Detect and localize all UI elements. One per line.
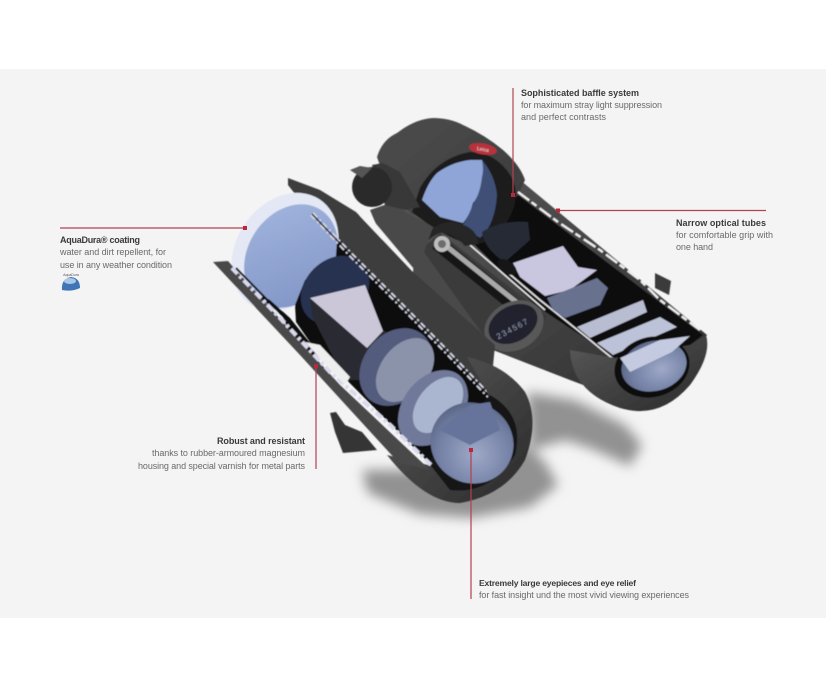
- callout: AquaDura coating: use in any weather condition: [60, 260, 172, 270]
- center hinge block: [372, 163, 420, 210]
- callout: robust and resistant: Robust and resistant: [217, 436, 305, 446]
- near barrel interior: [295, 241, 490, 466]
- far eyepiece rubber: [570, 335, 707, 411]
- objective hood: [377, 118, 525, 240]
- near barrel central wall: [288, 178, 495, 397]
- callout: eyepieces and eye relief: [469, 448, 690, 600]
- tripod bracket: [330, 412, 377, 453]
- near barrel lower wall: [213, 261, 430, 470]
- callout: narrow optical tubes: one hand: [676, 242, 713, 252]
- callout: narrow optical tubes: for comfortable grip with: [676, 230, 773, 240]
- callout: AquaDura coating: water and dirt repellent, for: [59, 247, 166, 257]
- icon: AquaDura water drop: AquaDura: [63, 273, 79, 277]
- central bridge: [350, 163, 490, 352]
- rear ring shadow: [287, 242, 383, 338]
- callout: narrow optical tubes: Narrow optical tubes: [676, 218, 766, 228]
- background panel: [0, 69, 826, 618]
- focus housing: [420, 233, 547, 350]
- near barrel front lens: [225, 186, 357, 326]
- hinge knob: [352, 167, 392, 207]
- diopter ring: 234567: [495, 316, 531, 341]
- objective lens: [422, 160, 483, 223]
- diopter ring: [475, 290, 553, 362]
- lens group 1: [344, 314, 448, 420]
- callout: AquaDura coating: AquaDura® coating: [60, 235, 140, 245]
- top wall detail: [312, 214, 489, 396]
- far barrel body: [390, 180, 707, 410]
- far barrel cutaway interior: [470, 185, 703, 358]
- callout: baffle system: [511, 88, 662, 197]
- callout: robust and resistant: housing and special varnish for metal parts: [138, 461, 306, 471]
- bridge grey body: [370, 203, 490, 352]
- inner barrel dark: [412, 152, 516, 245]
- far barrel prism: [513, 246, 597, 296]
- focus knob: [495, 256, 519, 278]
- callout: baffle system: Sophisticated baffle system: [521, 88, 639, 98]
- red logo badge: Leica: [476, 146, 489, 154]
- binocular illustration: [210, 118, 707, 503]
- callout: AquaDura coating: [59, 226, 247, 291]
- callout: narrow optical tubes: [556, 208, 773, 252]
- callout: eyepieces and eye relief: for fast insight und the most vivid viewing experiences: [479, 590, 690, 600]
- icon: AquaDura water drop: [62, 273, 80, 291]
- main prism: [310, 285, 383, 348]
- callout: robust and resistant: thanks to rubber-armoured magnesium: [152, 448, 305, 458]
- eyecup tab: [655, 273, 671, 295]
- far barrel: [377, 118, 707, 411]
- near barrel: [210, 172, 532, 503]
- far barrel top lens: [482, 222, 530, 262]
- hinge pin: [350, 166, 372, 178]
- lens group 2: [384, 356, 482, 460]
- white gap: [360, 212, 413, 272]
- red logo badge: [468, 141, 498, 157]
- far barrel lens elements: [547, 278, 608, 318]
- floor shadows: [362, 392, 642, 518]
- far eyepiece lens: [608, 328, 696, 406]
- near eyepiece rubber: [387, 357, 532, 503]
- near barrel front lens halo: [210, 172, 360, 332]
- callout: eyepieces and eye relief: Extremely large eyepieces and eye relief: [479, 578, 636, 588]
- objective lens shadow ring: [462, 160, 497, 238]
- callout: baffle system: and perfect contrasts: [521, 112, 606, 122]
- focus wheel: [420, 222, 478, 250]
- near eyepiece lens: [416, 387, 528, 499]
- callout: baffle system: for maximum stray light suppression: [521, 100, 662, 110]
- dark lower prism: [310, 298, 400, 380]
- callout: robust and resistant: [138, 364, 318, 471]
